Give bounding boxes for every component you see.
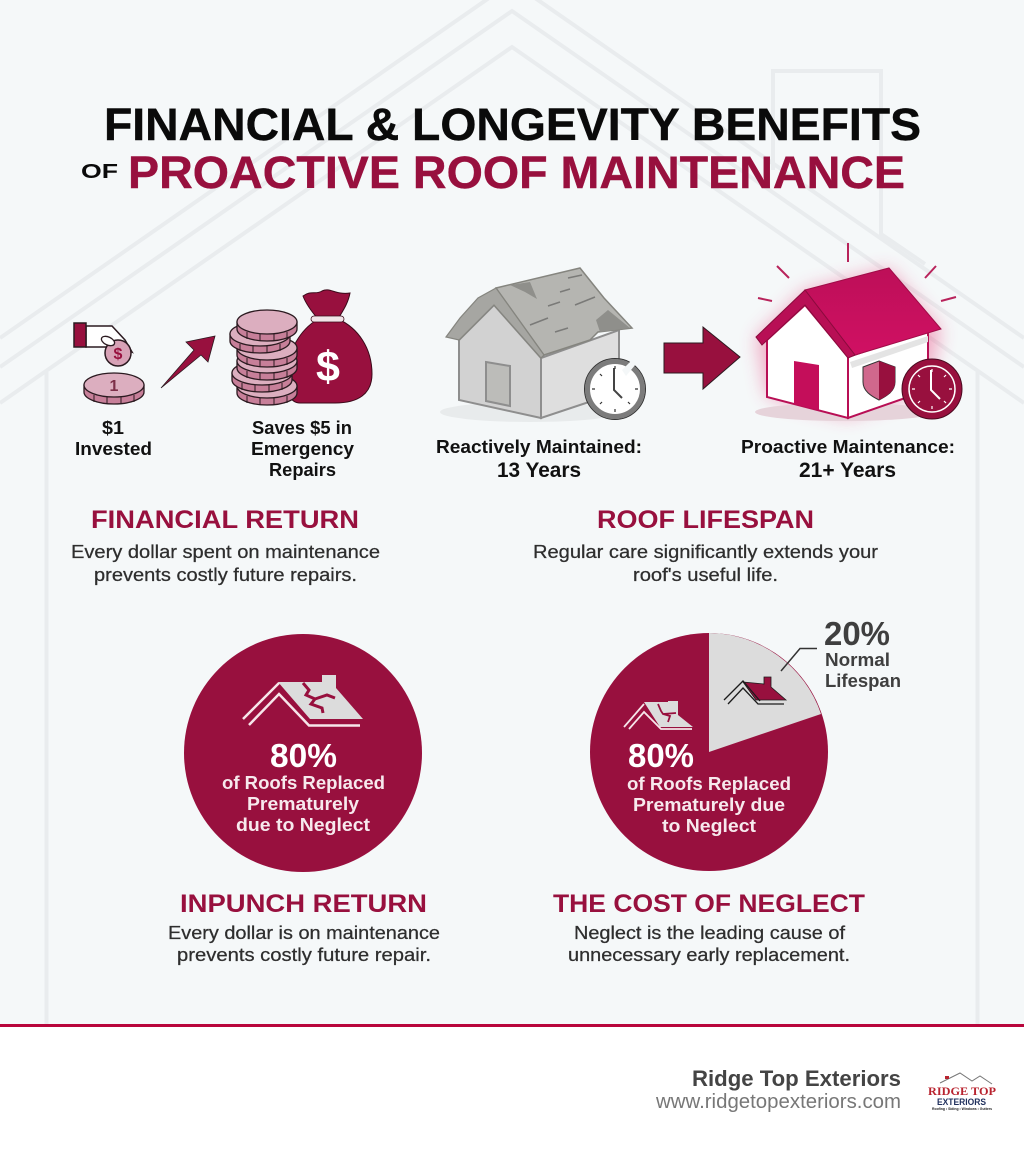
text: circle caption — [222, 773, 385, 835]
panel: inpunch return — [168, 634, 440, 965]
icon: healthy pink house — [755, 268, 941, 421]
icon: small healthy roof — [724, 677, 786, 704]
title — [81, 99, 921, 198]
text: roof lifespan description — [533, 542, 878, 585]
footer — [0, 1024, 1024, 1154]
text: financial return description: prevents costly future repairs. — [94, 565, 357, 585]
icon: shine rays — [758, 243, 956, 301]
icon: hand dropping coin — [74, 323, 132, 366]
text: pie caption: of Roofs Replaced — [627, 774, 791, 794]
heading: inpunch return: INPUNCH RETURN — [180, 890, 427, 918]
text: circle caption: Prematurely — [247, 794, 359, 814]
logo — [928, 1073, 996, 1111]
label: 20 percent normal lifespan: Lifespan — [825, 671, 901, 691]
arrow: reactive to proactive — [664, 327, 740, 389]
label: one dollar invested: Invested — [75, 439, 152, 459]
label: reactively maintained — [436, 437, 642, 482]
heading: the cost of neglect: THE COST OF NEGLECT — [553, 890, 865, 918]
text: roof lifespan description: roof's useful life. — [633, 565, 778, 585]
text: financial return description — [71, 542, 380, 585]
text: cost of neglect description — [568, 923, 850, 965]
icon: healthy clock — [902, 359, 962, 419]
text: inpunch return description — [168, 923, 440, 965]
label: proactive maintenance: 21+ Years — [799, 459, 896, 482]
icon: one dollar coin — [84, 373, 144, 404]
circle stat — [184, 634, 422, 872]
label: reactively maintained: 13 Years — [497, 459, 581, 482]
label: saves five dollars: Saves $5 in — [252, 418, 352, 438]
arrow: growth — [161, 336, 215, 388]
text: pie caption: to Neglect — [662, 816, 756, 836]
logo: EXTERIORS — [937, 1097, 986, 1107]
text: inpunch return description: Every dollar is on maintenance — [168, 923, 440, 943]
text: circle caption: due to Neglect — [236, 815, 370, 835]
icon: damaged grey house — [440, 268, 632, 422]
label: one dollar invested — [75, 418, 152, 459]
icon: hand dropping coin: $ — [114, 346, 123, 363]
label: proactive maintenance — [741, 437, 955, 482]
label: saves five dollars — [251, 418, 354, 480]
label: saves five dollars: Emergency — [251, 439, 354, 459]
leader line — [781, 648, 817, 671]
logo: RIDGE TOP — [928, 1084, 996, 1098]
title: FINANCIAL & LONGEVITY BENEFITS — [104, 99, 921, 150]
label: 20 percent normal lifespan — [824, 615, 901, 691]
panel: financial return — [71, 290, 380, 585]
text: website: www.ridgetopexteriors.com — [655, 1091, 901, 1113]
icon: small cracked roof — [624, 701, 693, 729]
panel: the cost of neglect — [553, 615, 901, 965]
heading: roof lifespan: ROOF LIFESPAN — [597, 506, 814, 534]
title: PROACTIVE ROOF MAINTENANCE — [128, 147, 905, 198]
icon: broken clock — [584, 358, 646, 420]
text: pie caption: Prematurely due — [633, 795, 785, 815]
icon: shield — [863, 361, 895, 400]
text: pie caption — [627, 774, 791, 836]
title: OF — [81, 161, 118, 183]
text: roof lifespan description: Regular care significantly extends your — [533, 542, 878, 562]
text: company name: Ridge Top Exteriors — [692, 1066, 901, 1091]
heading: financial return: FINANCIAL RETURN — [91, 506, 359, 534]
label: one dollar invested: $1 — [102, 418, 124, 438]
label: 20 percent normal lifespan: Normal — [825, 650, 890, 670]
icon: cracked roof — [243, 675, 363, 726]
text: inpunch return description: prevents costly future repair. — [177, 945, 431, 965]
text: financial return description: Every dollar spent on maintenance — [71, 542, 380, 562]
text: circle caption: of Roofs Replaced — [222, 773, 385, 793]
panel: roof lifespan — [436, 243, 962, 585]
text: cost of neglect description: Neglect is the leading cause of — [574, 923, 846, 943]
logo: Roofing • Siding • Windows • Gutters — [932, 1107, 992, 1111]
text: 80 percent: 80% — [628, 737, 694, 774]
icon: coin stack — [230, 310, 297, 405]
icon: one dollar coin: 1 — [110, 378, 119, 395]
icon: money bag: $ — [316, 343, 340, 391]
label: proactive maintenance: Proactive Maintenance: — [741, 437, 955, 457]
label: saves five dollars: Repairs — [269, 460, 336, 480]
text: cost of neglect description: unnecessary early replacement. — [568, 945, 850, 965]
label: reactively maintained: Reactively Maintained: — [436, 437, 642, 457]
icon: money bag — [287, 290, 372, 403]
pie chart — [590, 633, 828, 871]
label: 20 percent normal lifespan: 20% — [824, 615, 890, 652]
text: 80 percent: 80% — [270, 737, 337, 774]
